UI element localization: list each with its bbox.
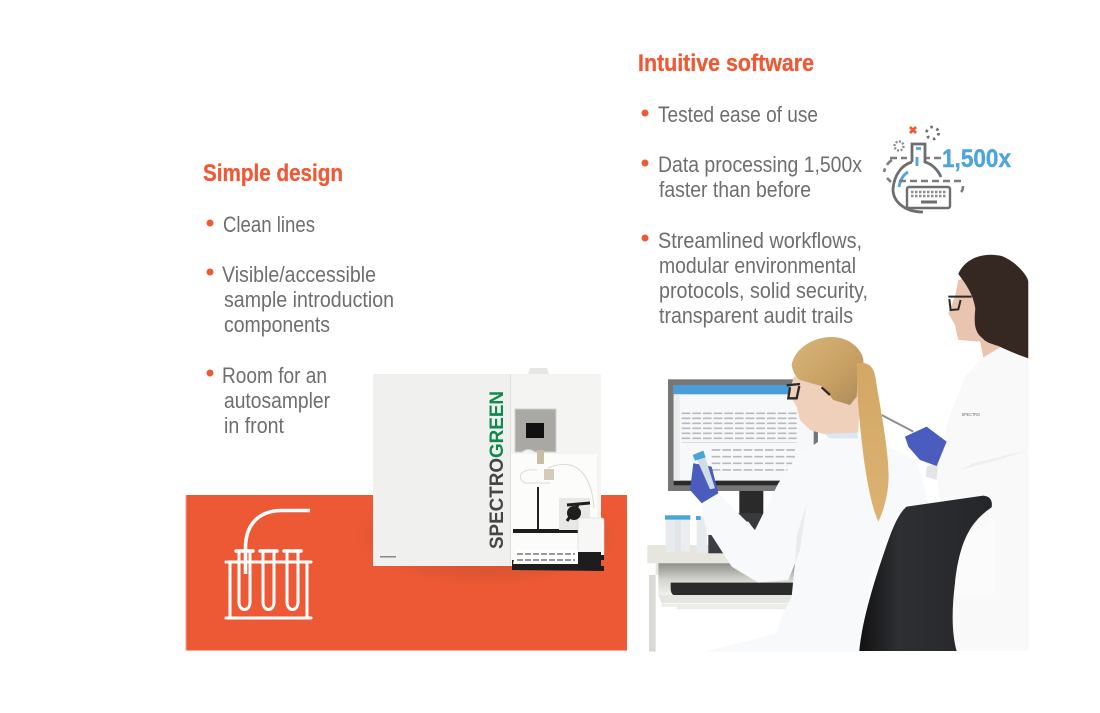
panel: orange base (186, 483, 627, 650)
bullet list: simple design: Room for an (222, 363, 327, 388)
monitor (668, 379, 818, 553)
hair (958, 255, 1028, 358)
bullet list: intuitive software: modular environmental (659, 253, 856, 278)
1,500x label: 1,500x (942, 145, 1011, 173)
office chair (859, 496, 992, 651)
bullet list: simple design (206, 212, 394, 438)
image: spectrogreen instrument (373, 368, 604, 571)
dotted circles (894, 142, 904, 150)
autosampler unit (578, 518, 604, 556)
bullet list: intuitive software: faster than before (659, 177, 811, 202)
bullet list: intuitive software: Tested ease of use (658, 102, 818, 127)
peristaltic pump (559, 498, 590, 530)
instrument body (373, 374, 601, 566)
bullet list: simple design: Visible/accessible (222, 262, 376, 287)
window plate (515, 409, 556, 452)
bullet list: intuitive software: Streamlined workflows, (658, 228, 862, 253)
sleeve cuff (926, 463, 938, 480)
coat (702, 433, 928, 652)
flask (912, 144, 941, 177)
bullet list: simple design: sample introduction (224, 287, 394, 312)
bullet list: intuitive software: Data processing 1,500x (658, 152, 863, 177)
keyboard (907, 187, 950, 208)
bullet list: intuitive software: protocols, solid security, (659, 278, 868, 303)
keyboard (671, 583, 793, 595)
tubing (520, 464, 594, 508)
dashed orbit (884, 158, 963, 192)
instrument chimney (528, 368, 549, 374)
face and neck (948, 277, 1000, 357)
tablet stylus (882, 415, 913, 432)
heading: intuitive software: Intuitive software (638, 50, 814, 77)
heading: simple design: Simple design (203, 160, 343, 187)
sample tubes (665, 515, 707, 553)
flask blue accents (899, 148, 921, 187)
orange cross (910, 127, 916, 133)
safety glasses (948, 297, 972, 310)
bullet list: simple design: autosampler (224, 388, 330, 413)
coat logo: SPECTRO (962, 412, 980, 417)
icon: flask with keyboard, 1,500x (884, 127, 1011, 212)
glove (690, 463, 718, 503)
collar (824, 432, 858, 438)
hair (792, 337, 863, 405)
safety glasses (787, 384, 830, 398)
bullet list: intuitive software (642, 102, 868, 328)
bullet list: intuitive software: transparent audit trails (659, 303, 853, 328)
seated scientist (690, 337, 928, 652)
held tube (695, 452, 715, 489)
neck and face (788, 373, 860, 434)
bullet list: simple design: in front (224, 413, 285, 438)
gloved hand (905, 427, 947, 466)
bullet list: simple design: Clean lines (223, 212, 315, 237)
ponytail (857, 363, 889, 522)
icon: test tubes in rack (226, 510, 311, 618)
standing scientist (882, 255, 1028, 651)
desk (647, 545, 797, 652)
coat (937, 345, 1028, 651)
bullet list: simple design: components (224, 312, 330, 337)
stand (537, 487, 539, 530)
panel: simple design text (203, 160, 394, 438)
photo: lab workstation with scientists (647, 255, 1028, 652)
sample compartment (511, 454, 597, 566)
panel: intuitive software text (638, 50, 868, 328)
brand logo: SPECTROGREEN (487, 391, 508, 549)
